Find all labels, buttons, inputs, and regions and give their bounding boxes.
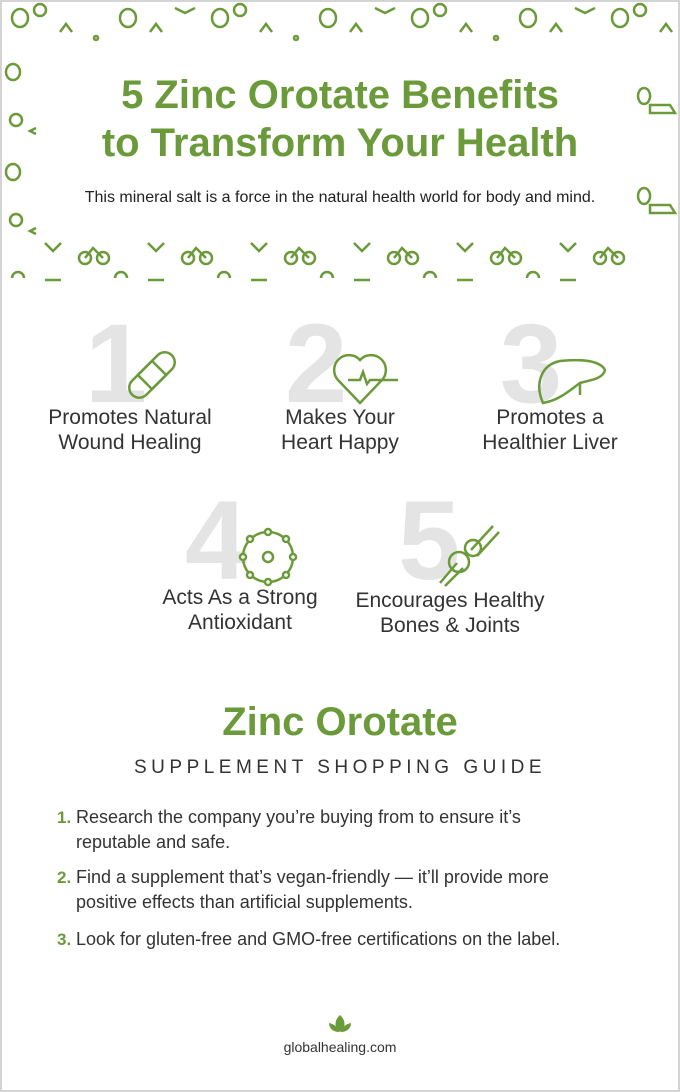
benefit 5: 5 [398,478,460,603]
benefit 1 [48,301,212,454]
benefit 3 [482,301,618,454]
icon: heart [332,354,398,405]
background pattern [4,2,678,282]
benefit 4: Acts As a Strong [162,586,318,609]
guide list: 2. [57,868,71,887]
title: to Transform Your Health [102,121,578,165]
icon: bone joint [439,525,500,587]
title [102,73,578,165]
benefit 1: Wound Healing [58,431,202,454]
guide list: positive effects than artificial supplements. [76,892,413,912]
benefit 5: Bones & Joints [380,614,520,637]
logo: globalhealing.com [284,1039,396,1055]
guide heading: Zinc Orotate [222,700,458,744]
icon: bandage [128,351,176,399]
benefit 2 [281,301,399,454]
title: 5 Zinc Orotate Benefits [121,73,559,117]
benefit 5 [355,478,545,637]
benefit 2: Heart Happy [281,431,399,454]
subtitle: This mineral salt is a force in the natural health world for body and mind. [85,189,595,206]
benefit 3: Healthier Liver [482,431,618,454]
benefit 1: 1 [85,301,147,426]
benefit 3: Promotes a [496,406,604,429]
benefit 4 [162,478,318,634]
guide list [57,807,560,949]
benefit 4: Antioxidant [188,611,292,634]
guide subheading: SUPPLEMENT SHOPPING GUIDE [134,757,546,778]
guide list: Find a supplement that’s vegan-friendly — it’ll provide more [76,867,549,887]
benefit 2: 2 [285,301,347,426]
guide list: 1. [57,808,71,827]
icon: liver [538,358,606,404]
logo [284,1015,396,1055]
guide list: reputable and safe. [76,832,230,852]
benefit 1: Promotes Natural [48,406,212,429]
guide list: Research the company you’re buying from to ensure it’s [76,807,521,827]
benefit 3: 3 [500,301,562,426]
benefit 2: Makes Your [285,406,395,429]
icon: antioxidant [238,528,298,586]
guide list: Look for gluten-free and GMO-free certifications on the label. [76,929,560,949]
benefit 5: Encourages Healthy [355,589,545,612]
benefit 4: 4 [185,478,247,603]
guide list: 3. [57,930,71,949]
